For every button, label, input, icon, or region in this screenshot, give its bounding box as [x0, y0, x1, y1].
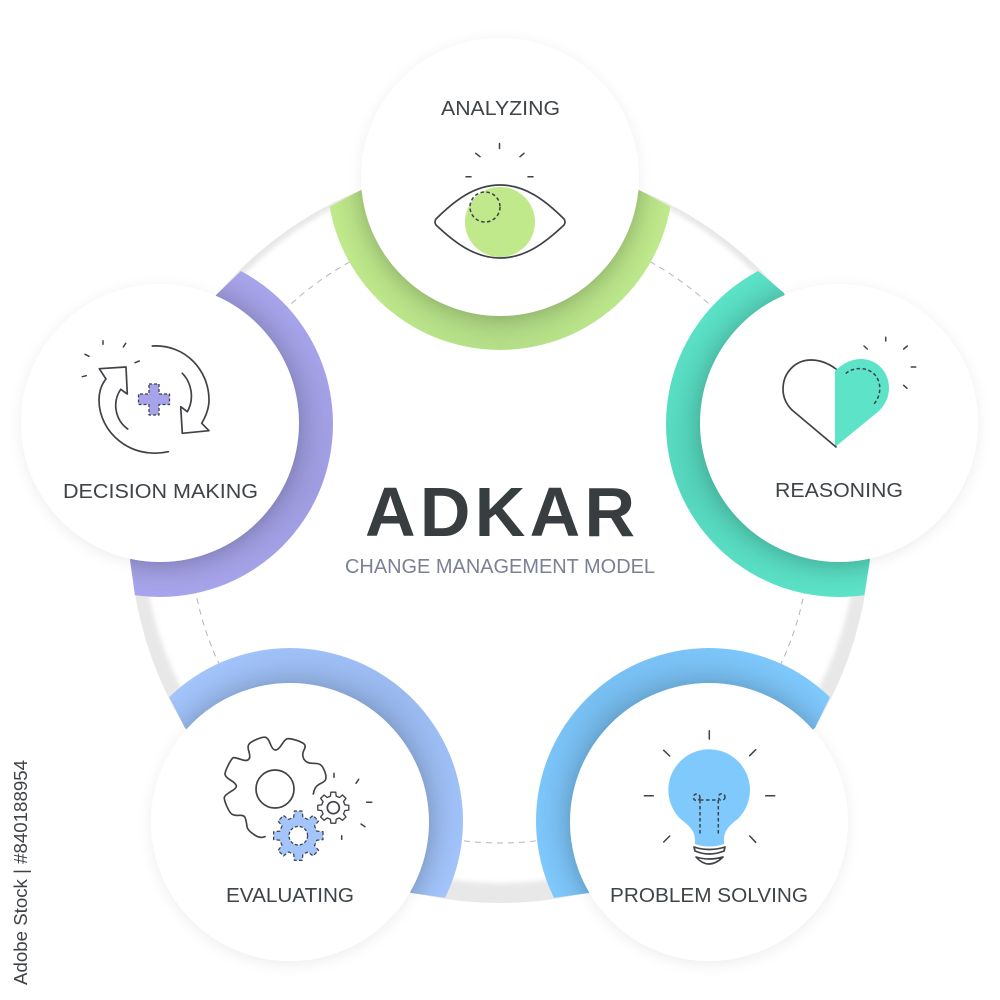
stock id caption: Adobe Stock | #840188954 [11, 760, 31, 985]
icon: eye [435, 144, 565, 258]
icon: heart [783, 337, 916, 447]
white circle [21, 284, 299, 562]
label: evaluating: EVALUATING [226, 885, 354, 907]
icon: gears [224, 737, 372, 860]
icon: cycle arrows with plus [82, 341, 209, 453]
green arc [330, 190, 670, 350]
label: decision making: DECISION MAKING [63, 481, 258, 503]
periwinkle arc [169, 648, 463, 898]
panel: problem solving [536, 648, 848, 964]
label: reasoning: REASONING [775, 480, 903, 502]
subtitle: CHANGE MANAGEMENT MODEL [345, 556, 655, 578]
white circle [151, 683, 429, 961]
label: analyzing: ANALYZING [441, 98, 560, 120]
panel: reasoning [666, 271, 978, 597]
inner dashed circle [190, 223, 810, 843]
blue arc [536, 648, 830, 898]
teal arc [666, 271, 870, 597]
icon: light bulb [644, 731, 775, 864]
title: ADKAR: ADKAR [365, 473, 635, 551]
label: problem solving: PROBLEM SOLVING [610, 885, 808, 907]
panel: evaluating [150, 648, 463, 964]
panel: analyzing [330, 101, 670, 350]
outer gray ring [130, 163, 870, 903]
white circle [570, 683, 848, 961]
panel: decision making [20, 271, 333, 597]
purple arc [130, 271, 333, 597]
white circle [361, 38, 639, 316]
white circle [700, 284, 978, 562]
